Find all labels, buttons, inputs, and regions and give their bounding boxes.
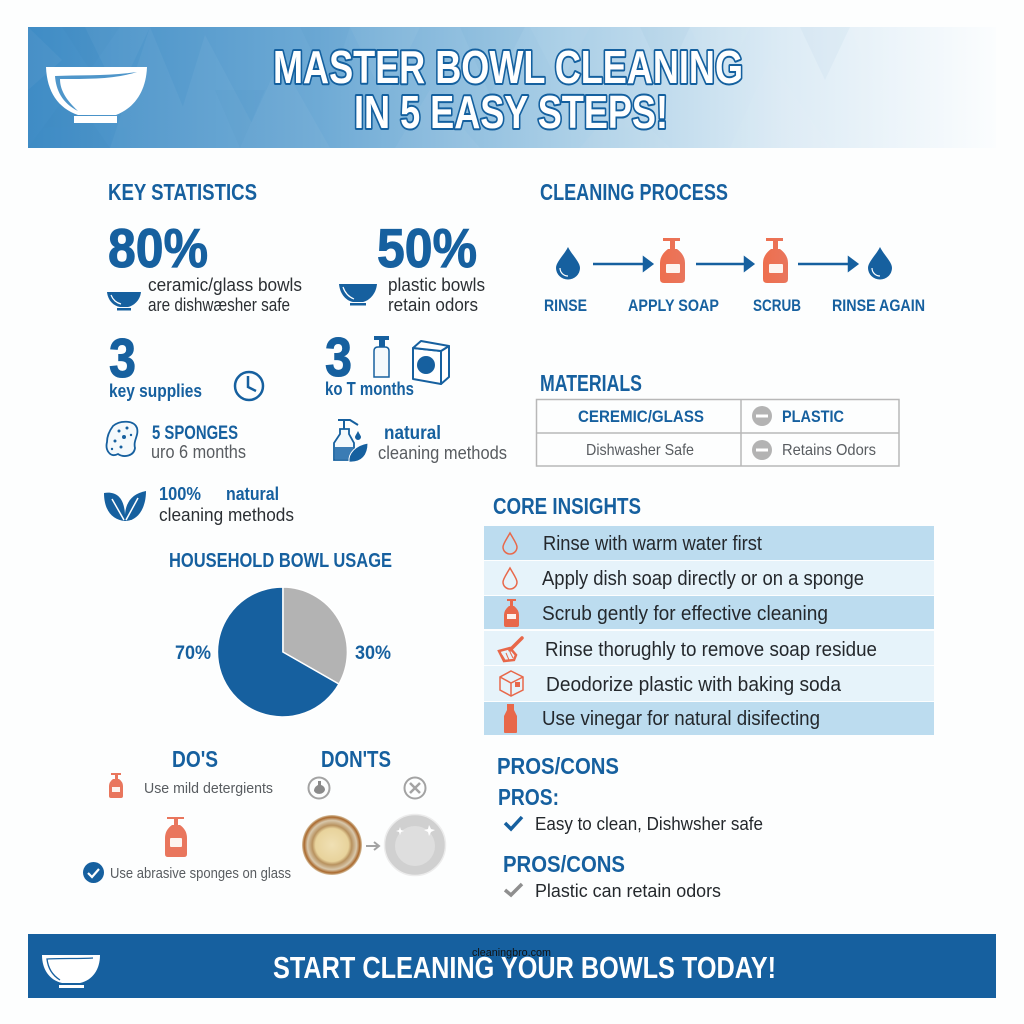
icon: soap bottle (504, 599, 519, 627)
insight text: Rinse thorughly to remove soap residue (545, 639, 877, 661)
panel: key statistics (104, 179, 507, 525)
insight text: Use vinegar for natural disifecting (542, 708, 820, 730)
text: use mild detergents: Use mild detergients (144, 780, 273, 797)
text: pro item: Easy to clean, Dishwsher safe (535, 814, 763, 834)
icon: blue bowl (339, 284, 377, 306)
stat: 3 key supplies: 3 (109, 327, 136, 389)
call to action: START CLEANING YOUR BOWLS TODAY! (273, 950, 776, 985)
step labels: SCRUB (753, 296, 801, 315)
icon: leaves (104, 491, 146, 521)
title (273, 41, 743, 138)
icon: header bowl (46, 67, 147, 123)
panel: cleaning process (540, 179, 925, 315)
text: natural methods (378, 423, 507, 463)
step labels: RINSE (544, 296, 587, 315)
text: 100 percent natural (159, 484, 294, 525)
panel: do's and don'ts (83, 746, 446, 883)
icon: large soap bottle (165, 817, 187, 857)
text: natural methods: natural (384, 423, 441, 444)
arrow (366, 842, 379, 850)
icon: drop outline (503, 533, 517, 554)
panel: core insights (484, 493, 934, 735)
text: ceramic stat: are dishwæsher safe (148, 295, 290, 315)
text: 100 percent natural: natural (226, 484, 279, 504)
icon: box (500, 671, 523, 696)
subheading: pros/cons: PROS/CONS (503, 851, 625, 877)
icon: clock (235, 372, 263, 400)
comparison table: Dishwasher Safe (586, 442, 694, 459)
step labels (544, 296, 925, 315)
icon: check circle (83, 862, 104, 883)
illustration: dirty bowl (302, 815, 362, 875)
insight text: Rinse with warm water first (543, 533, 762, 555)
text: sponges (151, 423, 246, 462)
text: 100 percent natural: 100% (159, 484, 201, 504)
stat: 80 percent: 80% (108, 217, 208, 279)
illustration: clean plate (384, 814, 446, 876)
icon: footer bowl (42, 955, 100, 988)
icon: soap bottle (763, 238, 788, 283)
icon: water drop (868, 247, 892, 280)
watermark: cleaningbro.com (472, 947, 551, 959)
step labels: APPLY SOAP (628, 296, 719, 315)
panel: household bowl usage (169, 550, 392, 717)
label: 30 percent: 30% (355, 643, 391, 664)
text: plastic stat (388, 275, 485, 315)
stat: 3 key supplies: key supplies (109, 381, 202, 401)
icon: sponge (107, 422, 137, 456)
heading: pros/cons: PROS/CONS (497, 753, 619, 779)
insight text: Apply dish soap directly or on a sponge (542, 568, 864, 590)
icon: water drop (556, 247, 580, 280)
text: ceramic stat (148, 275, 302, 315)
stat: 50 percent: 50% (377, 217, 477, 279)
heading: core insights: CORE INSIGHTS (493, 493, 641, 519)
arrow (593, 258, 652, 270)
text: 100 percent natural: cleaning methods (159, 505, 294, 525)
icon: blue check (505, 817, 522, 829)
comparison table: Retains Odors (782, 442, 876, 459)
heading: household bowl usage: HOUSEHOLD BOWL USAGE (169, 550, 392, 572)
heading: do's: DO'S (172, 746, 218, 772)
insight text (542, 533, 877, 730)
insight text: Scrub gently for effective cleaning (542, 603, 828, 625)
comparison table: PLASTIC (782, 407, 844, 426)
text: use abrasive sponges: Use abrasive sponges on glass (110, 865, 291, 882)
pie chart (217, 587, 347, 717)
icon: brush (499, 638, 522, 661)
stat: 3 months (325, 326, 414, 399)
text: natural methods: cleaning methods (378, 443, 507, 463)
stat: 3 key supplies (109, 327, 202, 401)
title: MASTER BOWL CLEANING (273, 41, 743, 93)
comparison table: CEREMIC/GLASS (578, 407, 704, 426)
icon: finger circle (308, 778, 330, 798)
icon: gray check (505, 884, 522, 895)
label: 70 percent: 70% (175, 643, 211, 664)
comparison table (536, 400, 899, 466)
icon: vinegar bottle (504, 704, 517, 733)
footer banner (28, 934, 996, 998)
text: con item: Plastic can retain odors (535, 881, 721, 901)
text: sponges: 5 SPONGES (152, 423, 238, 444)
text: plastic stat: plastic bowls (388, 275, 485, 295)
stat: 3 months: 3 (325, 326, 352, 388)
icon: blue bowl (107, 292, 141, 310)
icon: small soap bottle (109, 773, 123, 798)
icon: detergent box (413, 341, 449, 384)
insight text: Deodorize plastic with baking soda (546, 674, 842, 696)
step labels: RINSE AGAIN (832, 296, 925, 315)
icon: bottle (374, 336, 389, 377)
panel: pros and cons (497, 753, 763, 901)
heading: materials: MATERIALS (540, 370, 642, 396)
insight rows (484, 526, 934, 735)
text: plastic stat: retain odors (388, 295, 478, 315)
stat: 3 months: ko T months (325, 379, 414, 399)
title: IN 5 EASY STEPS! (354, 86, 668, 138)
heading: key statistics: KEY STATISTICS (108, 179, 257, 205)
text: ceramic stat: ceramic/glass bowls (148, 275, 302, 295)
heading: don'ts: DON'TS (321, 746, 391, 772)
subheading: pros: PROS: (498, 784, 559, 810)
panel: materials (536, 370, 899, 466)
icon: drop outline (503, 568, 517, 589)
header banner (28, 27, 996, 148)
heading: cleaning process: CLEANING PROCESS (540, 179, 728, 205)
icon: x circle (404, 778, 426, 798)
arrow (798, 258, 857, 270)
icon: soap bottle (660, 238, 685, 283)
icon: spray bottle with leaf (334, 420, 368, 462)
text: sponges: uro 6 months (151, 442, 246, 462)
arrow (696, 258, 753, 270)
